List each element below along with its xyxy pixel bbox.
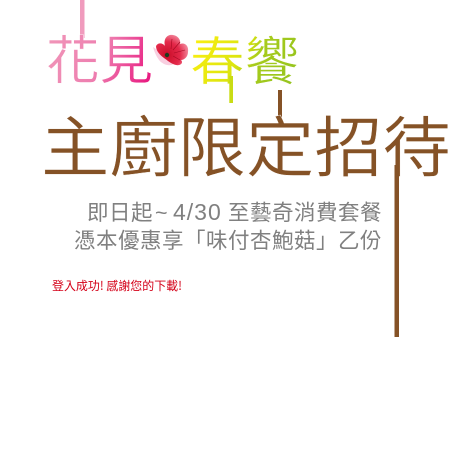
heading: 花見: 花見 (46, 33, 153, 91)
heading: 春饗: 春饗 (190, 34, 299, 92)
decorative line: brown stem long (394, 165, 399, 337)
decorative line: lime stem (229, 76, 233, 103)
success message: 登入成功! 感謝您的下載! (52, 277, 182, 294)
offer date line: 即日起 (87, 201, 153, 225)
offer item line: 憑本優惠享「味付杏鮑菇」乙份 (74, 229, 382, 253)
decorative line: brown stem top (278, 90, 282, 125)
decorative line: pink stem (80, 0, 84, 38)
text block: offer details (74, 199, 382, 253)
offer date line: ~ (155, 201, 168, 225)
icon: flower (153, 35, 188, 65)
offer date line: 4/30 (173, 199, 222, 225)
offer date line: 至藝奇消費套餐 (228, 201, 382, 225)
heading: 主廚限定招待: 主廚限定招待 (41, 111, 451, 185)
